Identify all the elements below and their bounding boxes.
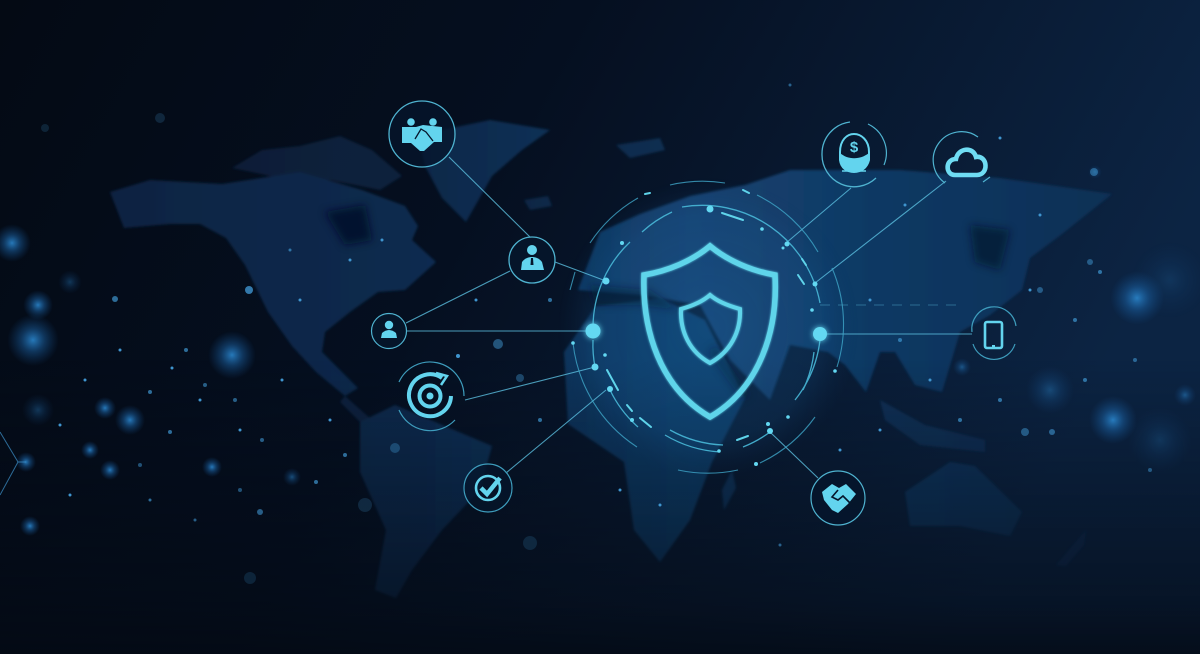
line: small person to person [406,271,510,323]
icon: dollar: $ [850,139,859,156]
main node left [586,324,600,338]
bokeh glows right [953,165,1200,472]
line: small person to left node [407,330,593,332]
hudson bay [325,205,372,245]
arctic islands [232,136,402,190]
mediterranean [590,285,680,310]
australia [905,462,1022,536]
icon: cloud [933,132,990,183]
iceland [524,196,552,210]
new zealand [1056,530,1086,566]
line: dollar to ring [786,188,851,243]
main node right [813,327,827,341]
line: lower handshake to ring [770,432,818,478]
line: cloud to ring [815,181,946,283]
sea of japan [970,225,1010,270]
red sea [708,345,750,400]
bokeh glows left [0,224,301,536]
svalbard [616,138,665,158]
line: dashed horizontal [820,304,958,306]
line: check to ring [506,390,606,473]
inner ring arcs [593,205,820,452]
central halo [558,178,858,478]
icon: target [399,362,464,431]
icon: person large [509,237,555,283]
particle dots [41,84,1152,584]
icon: handshake lower [811,471,865,525]
connector lines [406,157,972,478]
icon: dollar [822,122,886,187]
icon: check [464,464,512,512]
africa [564,298,745,562]
ring nodes [571,206,837,466]
greenland [418,120,550,222]
south america [360,405,492,598]
madagascar [722,470,736,510]
north america [110,172,436,396]
bright ring dashes [607,190,806,440]
line: top handshake to person [449,157,530,237]
line: target to ring [465,367,595,400]
japan [1020,222,1040,254]
outer ring arcs [570,181,844,473]
shield outer outline [644,246,775,417]
icon: handshake top [389,101,455,167]
partial network at left edge [0,432,26,495]
eurasia with europe [578,170,1112,400]
world map [110,120,1112,598]
central america and caribbean [340,396,372,424]
icon: person small [372,314,406,348]
shield inner outline [681,295,740,363]
indonesia [880,400,985,452]
icon: central shield [644,246,775,417]
line: tablet to right node [820,333,972,335]
line: person to ring [555,262,606,281]
icon: tablet [972,307,1016,359]
dark water inside the map [325,205,1010,400]
